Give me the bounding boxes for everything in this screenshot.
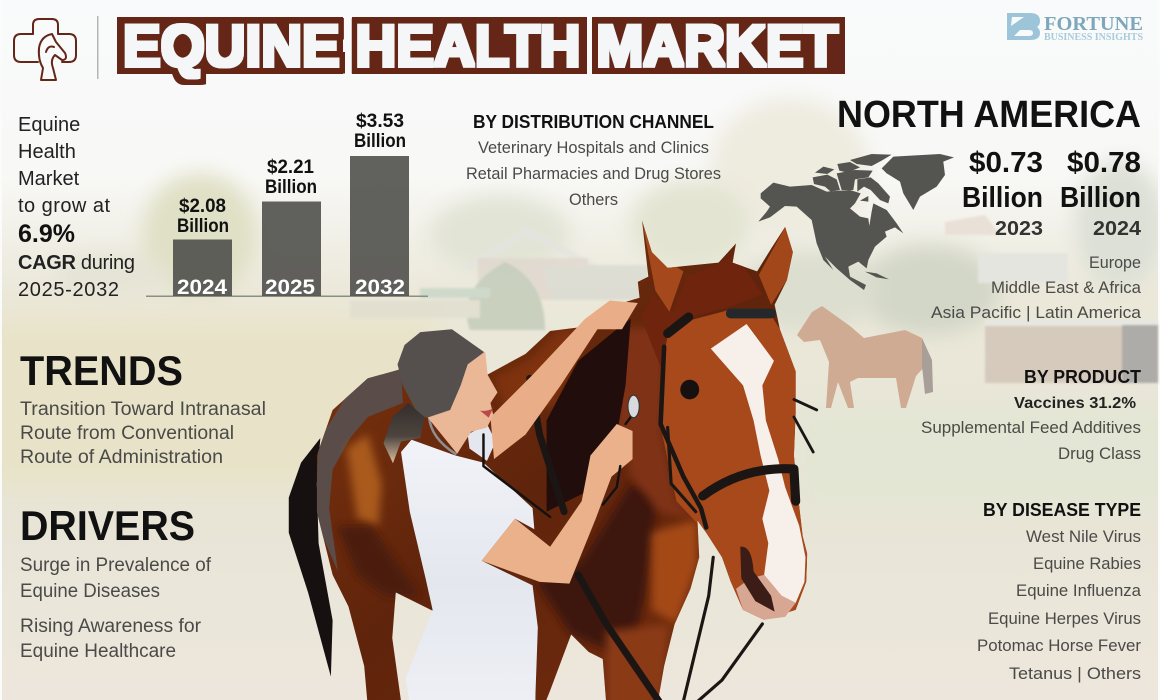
panel: other regions: Europe <box>1089 253 1141 272</box>
bar chart: market size <box>146 111 428 299</box>
neck and face <box>427 352 497 454</box>
panel: trends: TRENDS <box>20 347 183 394</box>
logo: Fortune Business Insights <box>1007 13 1143 43</box>
panel: drivers: Equine Diseases <box>20 581 160 602</box>
icon: map of north america <box>758 154 954 290</box>
panel: drivers: Surge in Prevalence of <box>20 555 212 576</box>
upper arm <box>490 301 638 459</box>
stethoscope <box>429 417 631 517</box>
panel: by disease type: Equine Rabies <box>1033 554 1141 573</box>
logo: Fortune Business Insights: BUSINESS INSIGHTS <box>1044 32 1143 43</box>
panel: by product <box>921 367 1141 463</box>
flank highlight <box>315 368 403 571</box>
bar 2032: $3.53 <box>356 111 404 132</box>
panel: north america heading and values <box>837 94 1142 240</box>
divider <box>97 16 98 79</box>
panel: north america heading and values: Billion <box>962 182 1043 214</box>
panel: by disease type: Potomac Horse Fever <box>977 636 1141 655</box>
panel: by disease type <box>977 500 1142 683</box>
bar 2025: Billion <box>265 177 317 198</box>
horse body <box>316 220 808 700</box>
panel: by product: Supplemental Feed Additives <box>921 418 1141 437</box>
horse eye <box>680 380 699 399</box>
panel: distribution channel: Retail Pharmacies and Drug Stores <box>466 164 721 183</box>
hair <box>398 329 484 418</box>
panel: by product: Vaccines 31.2% <box>1014 395 1136 412</box>
lower arm <box>482 424 633 584</box>
text block: CAGR summary: to grow at <box>18 195 110 217</box>
panel: distribution channel: Others <box>569 190 618 209</box>
veterinarian <box>383 301 639 700</box>
panel: other regions: Middle East & Africa <box>991 278 1142 297</box>
panel: other regions <box>931 253 1142 322</box>
logo: Fortune Business Insights: FORTUNE <box>1044 13 1143 35</box>
bar 2024: 2024 <box>177 276 227 299</box>
panel: north america heading and values: NORTH AMERICA <box>837 94 1141 136</box>
ponytail <box>383 403 425 463</box>
text block: CAGR summary: Health <box>18 141 76 163</box>
panel: trends <box>20 347 266 468</box>
head <box>662 310 807 620</box>
panel: drivers: DRIVERS <box>20 502 195 549</box>
bar 2025: $2.21 <box>267 157 314 178</box>
ears <box>642 221 683 312</box>
panel: trends: Route from Conventional <box>20 423 234 444</box>
page edges <box>1158 0 1160 700</box>
panel: drivers: Rising Awareness for <box>20 616 202 637</box>
text block: CAGR summary: Market <box>18 168 80 190</box>
panel: trends: Route of Administration <box>20 447 223 468</box>
bar 2032 <box>350 111 409 299</box>
uniform <box>401 440 538 700</box>
panel: by disease type: Equine Influenza <box>1016 581 1142 600</box>
icon: horse in medical cross <box>14 19 76 80</box>
text block: CAGR summary: 6.9% <box>18 220 75 248</box>
panel: by disease type: West Nile Virus <box>1026 527 1141 546</box>
chestpiece <box>628 395 639 418</box>
panel: north america heading and values: Billion <box>1060 182 1141 214</box>
panel: by disease type: BY DISEASE TYPE <box>983 500 1141 520</box>
horse blaze <box>711 324 805 603</box>
panel: north america heading and values: 2024 <box>1093 218 1142 240</box>
forelock <box>641 256 762 371</box>
panel: distribution channel: Veterinary Hospitals and Clinics <box>478 138 709 157</box>
bar 2024 <box>173 196 232 299</box>
panel: north america heading and values: $0.73 <box>969 147 1043 179</box>
panel: drivers: Equine Healthcare <box>20 641 176 662</box>
panel: north america heading and values: 2023 <box>995 218 1043 240</box>
panel: distribution channel <box>466 112 721 209</box>
neck <box>618 325 690 518</box>
panel: other regions: Asia Pacific | Latin America <box>931 303 1142 322</box>
panel: by disease type: Equine Herpes Virus <box>988 609 1141 628</box>
panel: by disease type: Tetanus | Others <box>1009 664 1141 683</box>
background farmhouse <box>350 226 648 330</box>
illustration: horse and veterinarian <box>280 210 830 700</box>
horse muzzle <box>736 547 796 620</box>
text block: CAGR summary: CAGR during <box>18 252 135 274</box>
panel: distribution channel: BY DISTRIBUTION CHANNEL <box>473 112 714 132</box>
horse tail <box>289 438 333 677</box>
bar 2025 <box>262 157 321 299</box>
bar 2024: $2.08 <box>179 196 226 217</box>
text block: CAGR summary <box>18 114 135 301</box>
bar 2024: Billion <box>177 216 229 237</box>
bar 2032: 2032 <box>355 276 405 299</box>
bar 2025: 2025 <box>265 276 315 299</box>
text block: CAGR summary: 2025-2032 <box>18 279 119 301</box>
background barn and horse <box>797 215 1158 408</box>
panel: drivers <box>20 502 212 662</box>
mane <box>547 319 631 512</box>
panel: by product: Drug Class <box>1058 444 1141 463</box>
text block: CAGR summary: Equine <box>18 114 80 136</box>
bar 2032: Billion <box>354 131 406 152</box>
title: EQUINE HEALTH MARKET <box>123 14 838 79</box>
panel: trends: Transition Toward Intranasal <box>20 399 266 420</box>
panel: north america heading and values: $0.78 <box>1067 147 1141 179</box>
chest <box>536 484 659 659</box>
panel: by product: BY PRODUCT <box>1024 367 1141 387</box>
bridle <box>530 313 817 700</box>
